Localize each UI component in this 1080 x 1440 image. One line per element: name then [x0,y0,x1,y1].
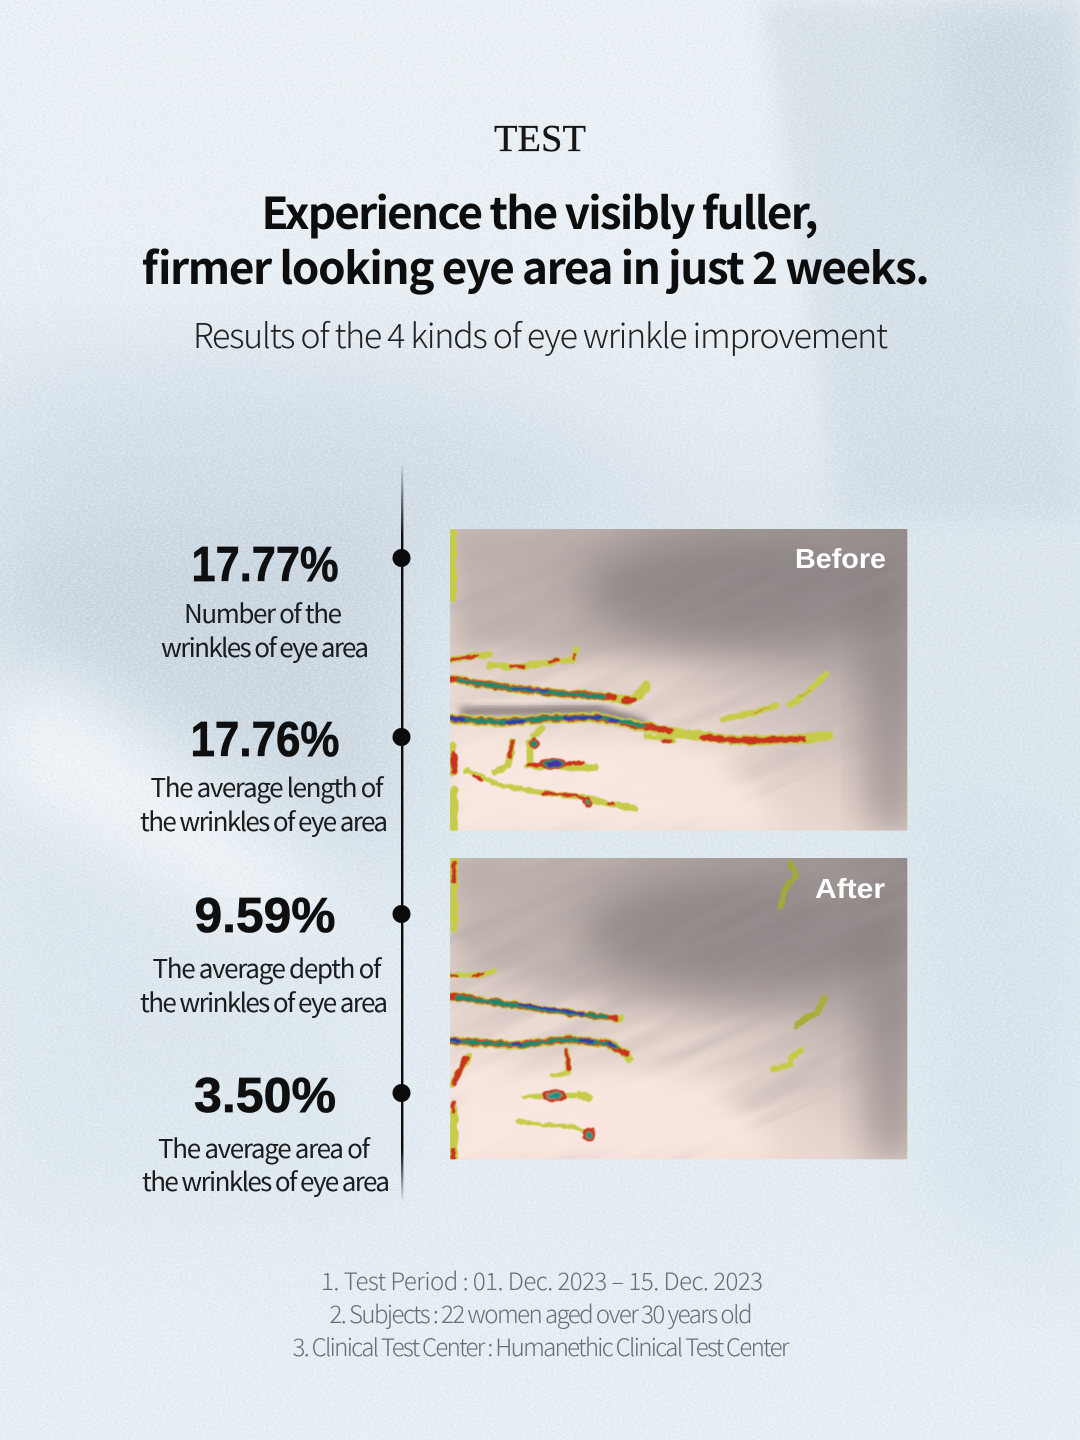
stat: average depth: the wrinkles of eye area [140,983,388,1020]
wrinkle traces [452,860,825,1158]
stat: average area [142,1069,390,1199]
stat: average length [140,713,388,839]
stat: average length: The average length of [150,768,385,805]
stat: average area: 3.50% [194,1069,336,1123]
wrinkle traces [451,533,828,828]
stat: number of wrinkles [161,538,369,665]
stat: average area: the wrinkles of eye area [142,1162,390,1199]
stat: number of wrinkles: 17.77% [192,538,338,592]
stat: average depth [140,889,388,1020]
stat: average length: 17.76% [190,713,340,767]
photo panel: before [450,529,908,831]
footnotes: test details: 2. Subjects : 22 women aged over 30 years old [330,1295,752,1330]
footnotes: test details: 3. Clinical Test Center : Humanethic Clinical Test Center [292,1328,790,1363]
stat: average depth: 9.59% [194,889,336,943]
stat: average length: the wrinkles of eye area [140,802,388,839]
headline [142,178,930,297]
footnotes: test details [292,1262,790,1363]
section label: TEST: TEST [494,118,586,160]
stat: average depth: The average depth of [152,949,383,986]
stat: number of wrinkles: Number of the [184,594,342,631]
stat: number of wrinkles: wrinkles of eye area [161,628,369,665]
photo panel: after [450,858,908,1160]
stat: average area: The average area of [158,1129,372,1166]
headline: firmer looking eye area in just 2 weeks. [142,233,930,297]
label: Before: Before [795,543,886,574]
timeline axis with dots [392,462,410,1202]
subtitle: Results of the 4 kinds of eye wrinkle improvement [193,309,888,358]
headline: Experience the visibly fuller, [262,178,818,242]
footnotes: test details: 1. Test Period : 01. Dec. 2023 – 15. Dec. 2023 [321,1262,763,1297]
label: After: After [815,873,885,904]
